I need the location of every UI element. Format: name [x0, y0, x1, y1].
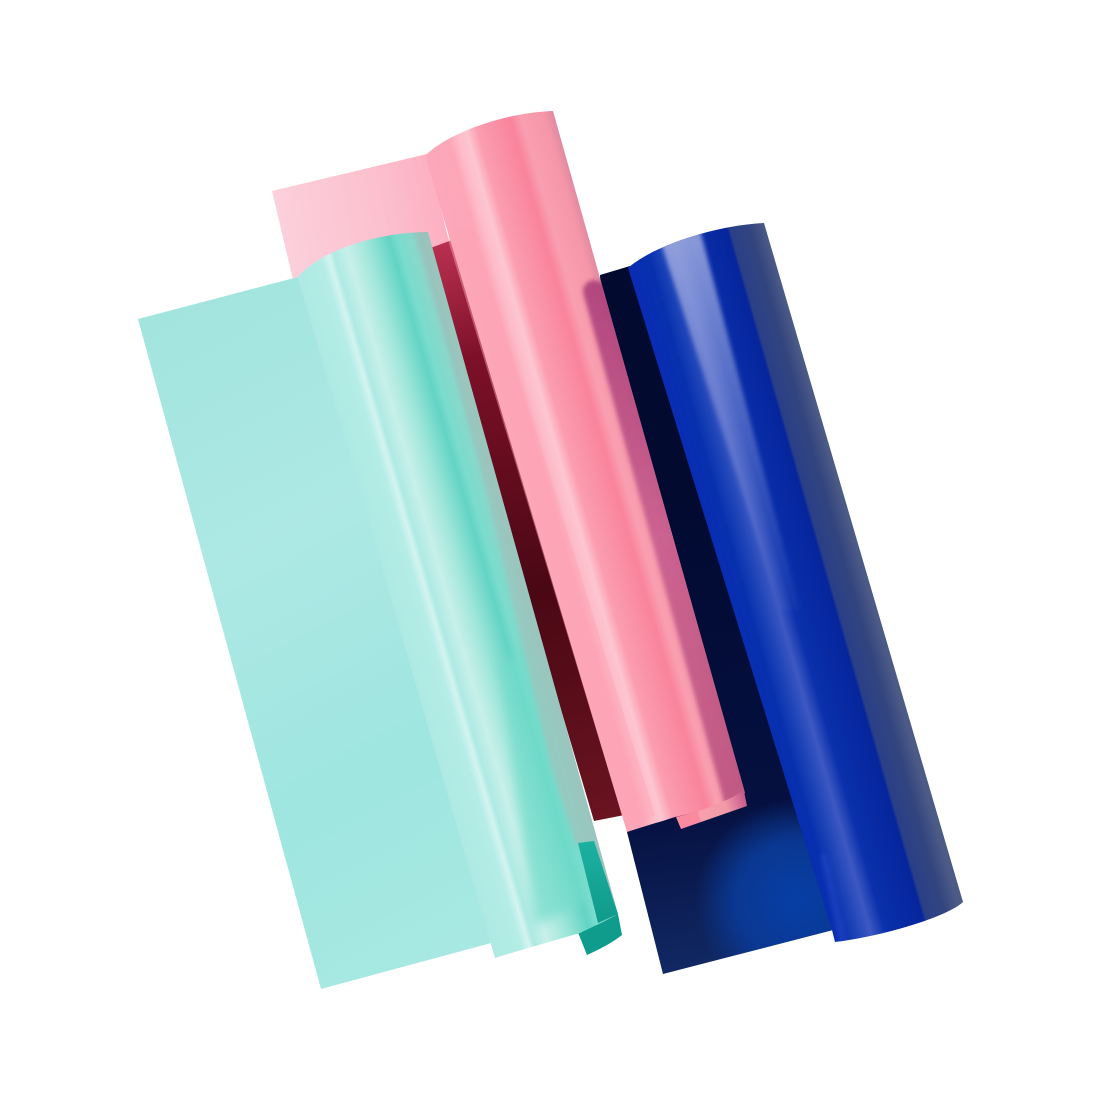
- pink roll inner fold: [448, 227, 655, 832]
- pink roll folded lip: [676, 791, 747, 829]
- navy sheet blue glow: [600, 266, 833, 974]
- mint roll teal inner end: [578, 841, 618, 923]
- blue roll: [628, 223, 963, 945]
- mint roll grey edge band: [425, 232, 600, 845]
- mint roll lower turquoise band: [502, 659, 582, 928]
- mint roll shading details: [425, 232, 600, 925]
- pink roll mauve overlap on navy: [583, 280, 750, 805]
- illustration: three vinyl rolls: [138, 111, 963, 989]
- shadow between mint and pink rolls: [425, 240, 640, 821]
- mint sheet: [138, 277, 495, 989]
- mint roll teal outer lip: [575, 912, 622, 955]
- mint roll: [298, 232, 622, 958]
- mint roll body: [298, 232, 618, 958]
- pink backing sheet: [272, 154, 455, 280]
- blue roll lower stripe: [822, 855, 848, 942]
- pink roll: [425, 111, 750, 832]
- navy sheet: [600, 266, 833, 974]
- blue roll upper highlight: [660, 230, 800, 610]
- blue roll details: [660, 230, 848, 945]
